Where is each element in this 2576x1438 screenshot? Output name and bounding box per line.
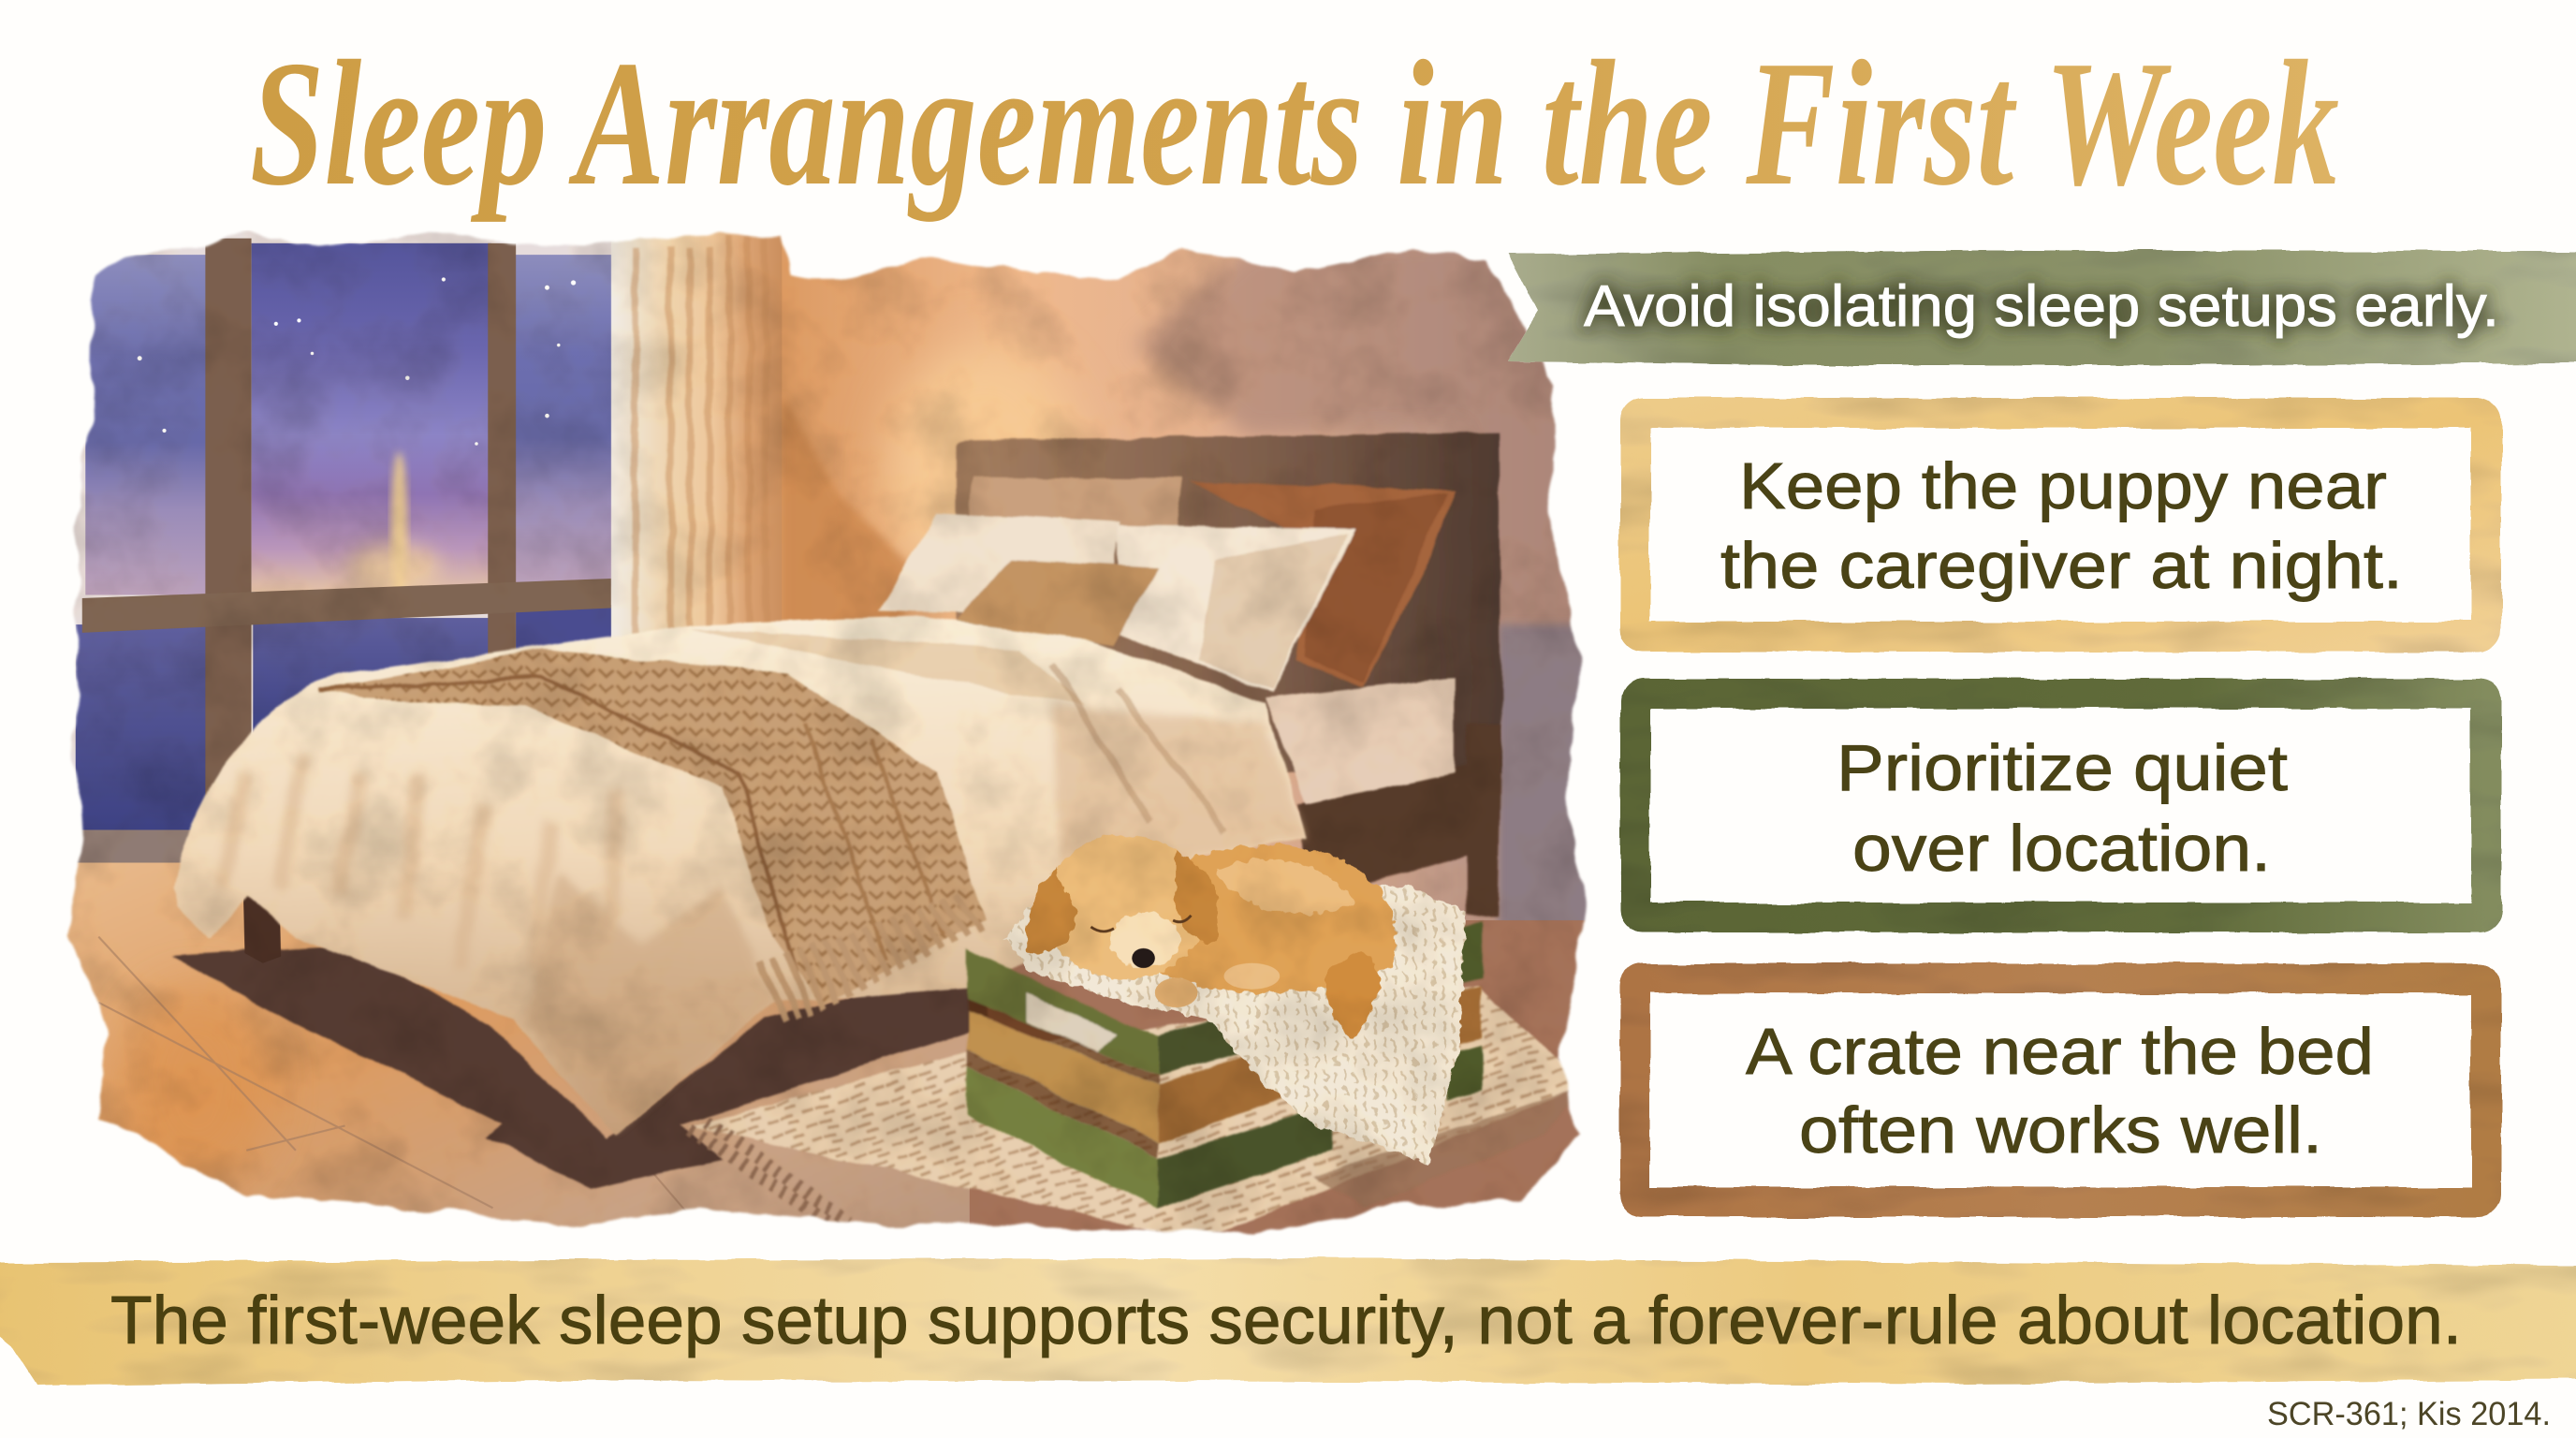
ribbon text glow: Avoid isolating sleep setups early. — [1584, 274, 2499, 339]
bed frame — [1298, 723, 1501, 917]
headboard — [956, 433, 1501, 772]
fleece blanket in crate — [1005, 879, 1466, 1164]
card: keep the puppy near: Keep the puppy near — [1739, 449, 2387, 522]
bed leg — [243, 888, 281, 963]
duvet — [172, 616, 1306, 1137]
rug — [690, 986, 1586, 1240]
card: a crate near the bed: A crate near the bed — [1746, 1015, 2374, 1088]
ribbon: avoid isolating sleep setups — [1508, 251, 2576, 365]
bottom takeaway banner: The first-week sleep setup supports security, not a forever-rule about location. — [110, 1284, 2462, 1358]
card: a crate near the bed: often works well. — [1799, 1093, 2322, 1167]
illustration: bedroom with sleeping puppy in crate — [33, 213, 1627, 1266]
card: keep the puppy near — [1635, 413, 2486, 637]
curtain — [611, 230, 782, 674]
source citation: SCR-361; Kis 2014. — [2267, 1396, 2551, 1432]
pillows — [879, 477, 1454, 694]
mattress — [1265, 677, 1454, 805]
crate — [968, 920, 1482, 1208]
puppy tail — [1326, 950, 1379, 1038]
puppy — [1026, 835, 1397, 1038]
bottom takeaway banner — [0, 1258, 2576, 1386]
floor — [50, 863, 1627, 1257]
card: prioritize quiet — [1635, 694, 2486, 917]
window with night sky — [66, 230, 616, 888]
stars — [138, 277, 576, 446]
puppy head — [1043, 835, 1208, 979]
ribbon text: Avoid isolating sleep setups early. — [1584, 274, 2499, 339]
card: prioritize quiet: Prioritize quiet — [1837, 731, 2288, 804]
card: a crate near the bed — [1635, 978, 2486, 1202]
wall — [772, 213, 1610, 937]
knit throw blanket — [320, 649, 986, 1022]
card: prioritize quiet: over location. — [1852, 812, 2271, 885]
puppy body — [1150, 845, 1397, 992]
watercolor mottling — [33, 213, 1627, 1266]
puppy ears — [1026, 851, 1219, 954]
shadow under bed — [172, 945, 986, 1188]
card: keep the puppy near: the caregiver at night. — [1720, 529, 2403, 602]
puppy face — [1090, 916, 1280, 1007]
